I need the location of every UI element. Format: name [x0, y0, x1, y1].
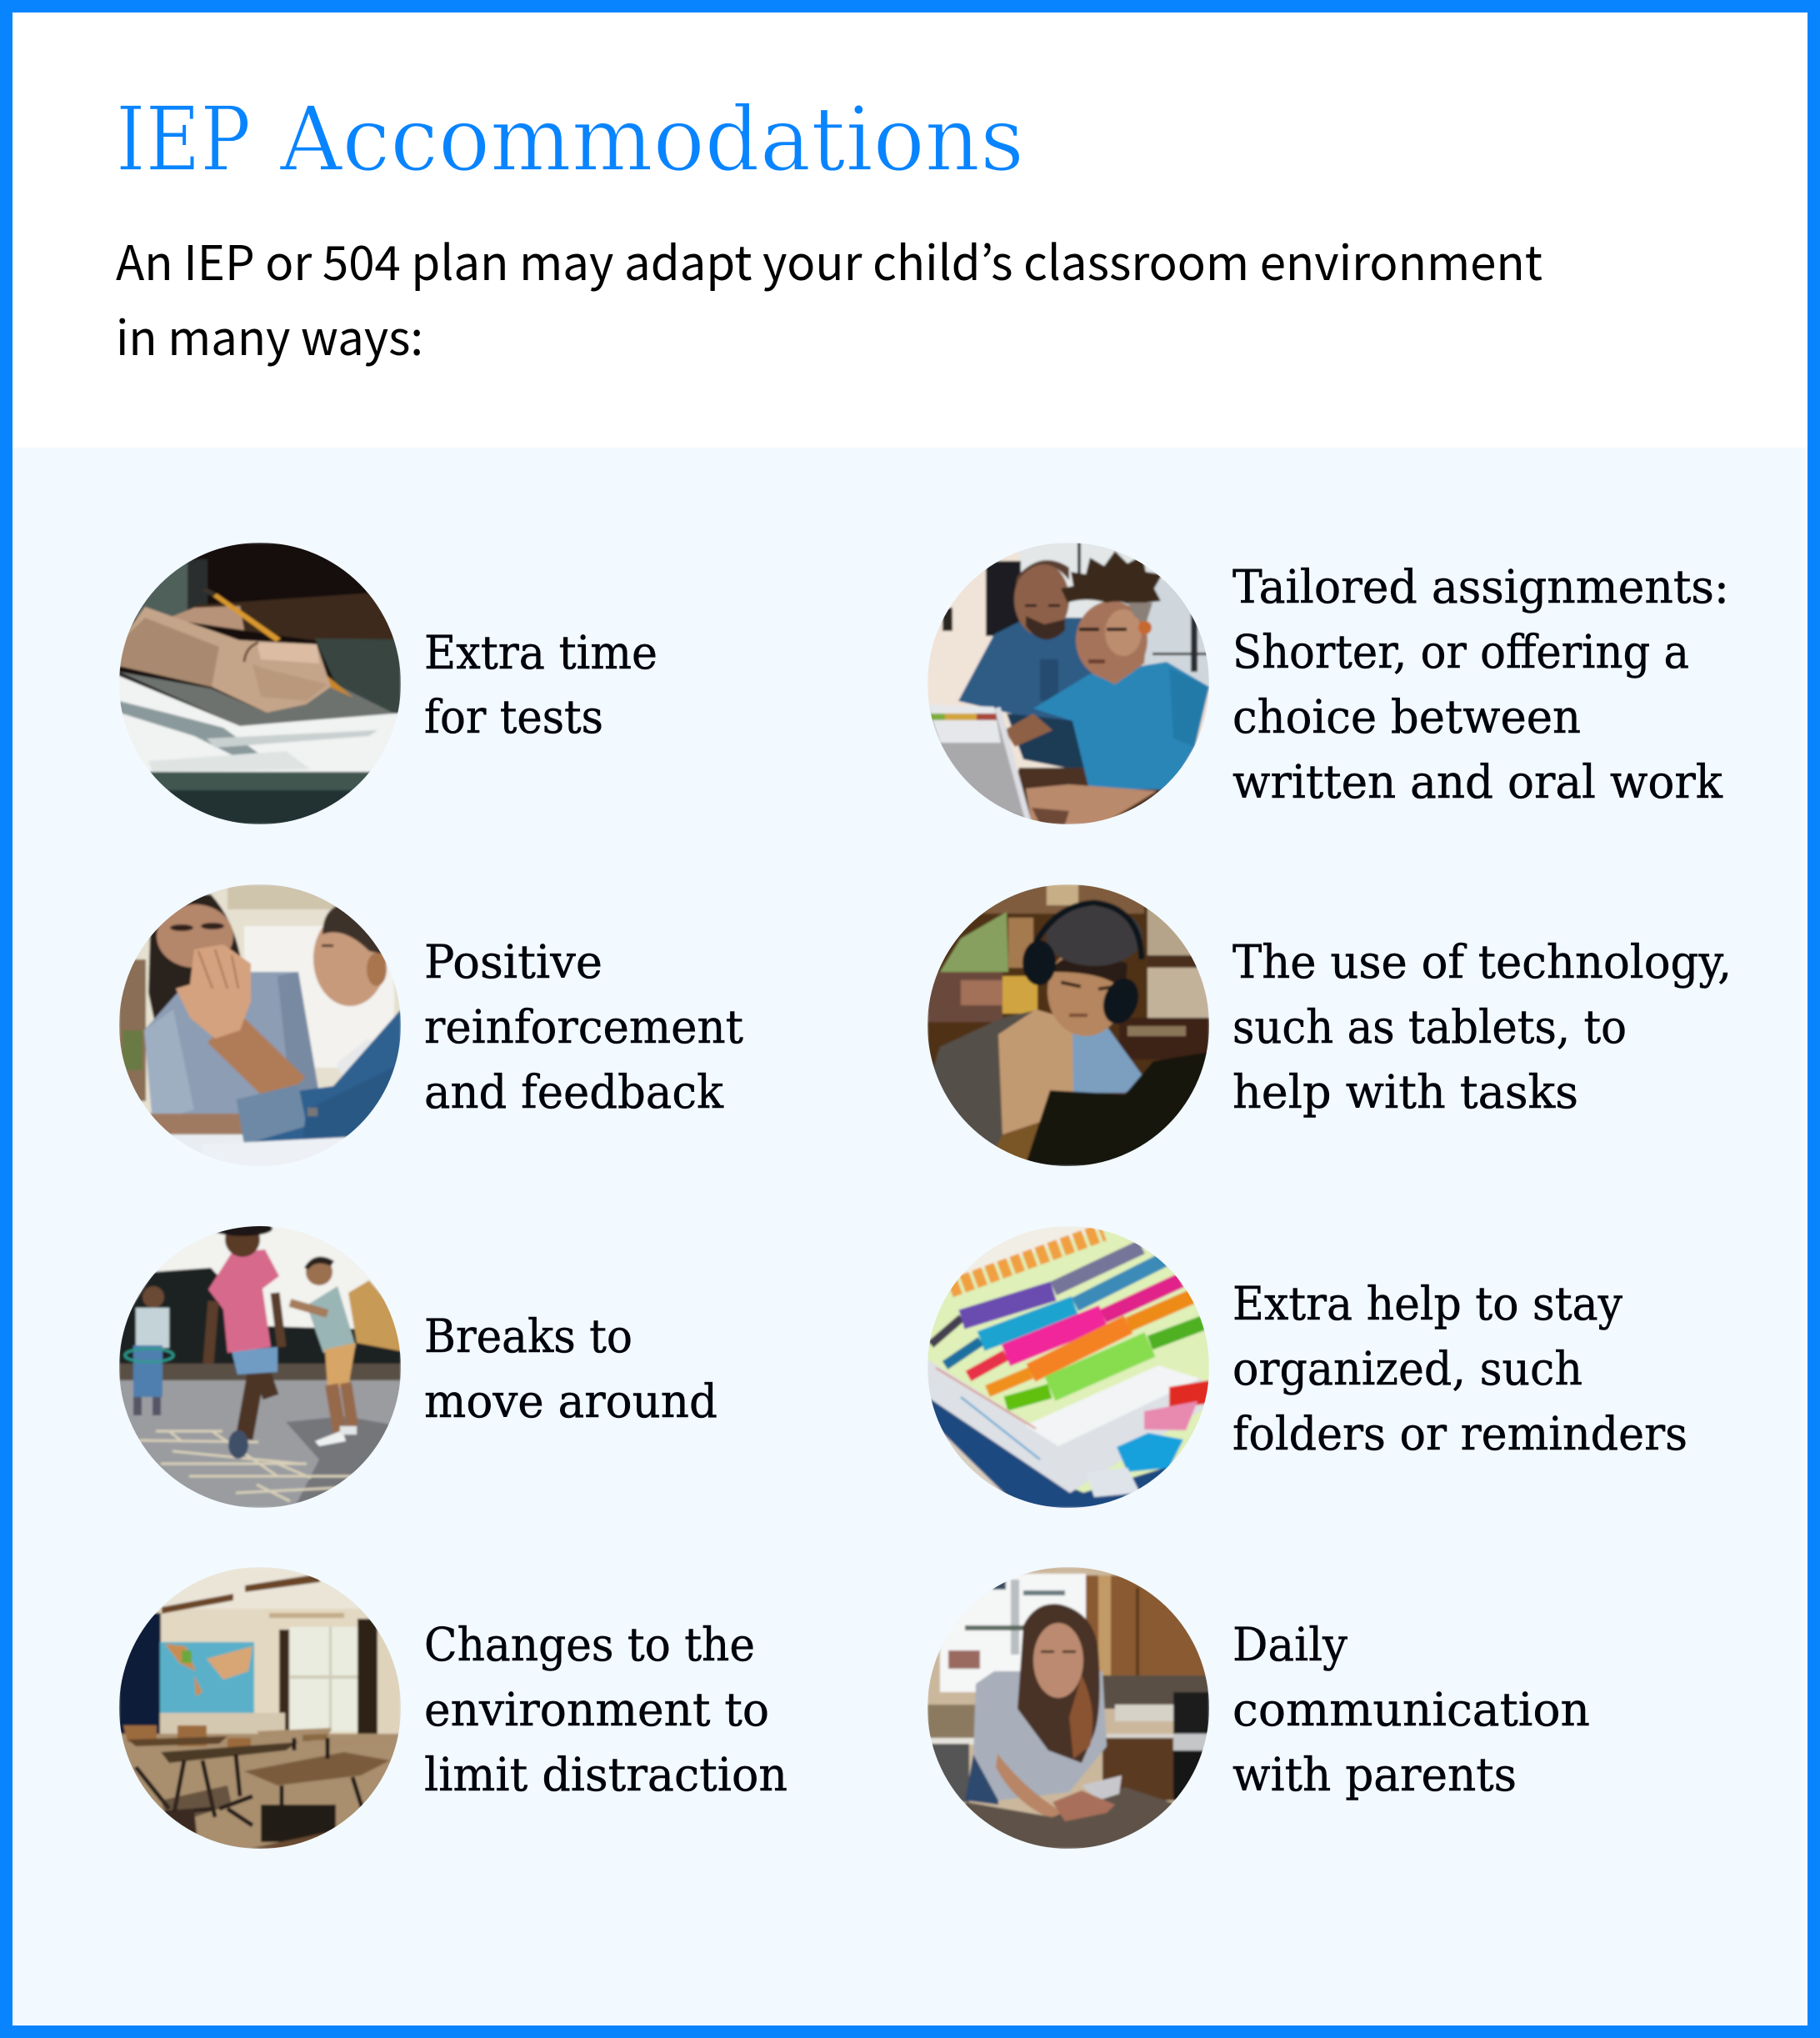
label text: with parents — [1232, 1748, 1517, 1801]
photo: father and son at laptop — [928, 543, 1209, 824]
label text: for tests — [424, 690, 603, 744]
intro text — [116, 226, 1542, 369]
label text: such as tablets, to — [1232, 1000, 1627, 1054]
photo: kids playing hopscotch — [119, 1221, 401, 1508]
item: positive reinforcement — [119, 884, 743, 1166]
label text — [1232, 1277, 1688, 1460]
label text: choice between — [1232, 690, 1581, 744]
label text — [424, 935, 743, 1119]
label text: Daily — [1232, 1618, 1348, 1671]
label text: Shorter, or offering a — [1232, 625, 1689, 678]
item: daily communication — [928, 1567, 1590, 1849]
title: Accommodations — [279, 88, 1024, 192]
label text: The use of technology, — [1232, 935, 1732, 989]
item: tailored assignments — [928, 543, 1729, 824]
label text: Tailored assignments: — [1232, 560, 1729, 613]
title: IEP — [116, 88, 251, 192]
item: use of technology — [928, 884, 1732, 1166]
label text: Extra help to stay — [1232, 1277, 1622, 1330]
photo: mother reading phone in kitchen — [928, 1567, 1209, 1849]
label text: Breaks to — [424, 1309, 632, 1363]
intro text: in many ways: — [116, 301, 423, 369]
label text: communication — [1232, 1683, 1590, 1736]
label text — [424, 1309, 718, 1428]
item: extra help to stay organized — [928, 1226, 1688, 1508]
photo: teen with headphones and laptop — [928, 884, 1209, 1166]
label text: reinforcement — [424, 1000, 743, 1054]
label text: Extra time — [424, 626, 658, 679]
intro text: An IEP or 504 plan may adapt your child’s classroom environment — [116, 226, 1542, 294]
panel: light blue list area — [12, 448, 1808, 2025]
label text — [424, 1618, 788, 1801]
label text: Positive — [424, 935, 602, 989]
label text — [1232, 1618, 1590, 1801]
label text: limit distraction — [424, 1748, 788, 1801]
label text: Changes to the — [424, 1618, 755, 1671]
photo: hand writing with pencil — [119, 543, 401, 824]
label text: move around — [424, 1375, 718, 1428]
item: extra time for tests — [119, 543, 658, 824]
photo: colored pens on notebook — [928, 1226, 1209, 1508]
label text — [1232, 935, 1732, 1119]
label text: environment to — [424, 1683, 769, 1736]
label text — [424, 626, 658, 744]
label text: help with tasks — [1232, 1065, 1578, 1119]
photo: empty classroom with world map — [119, 1567, 401, 1849]
label text: folders or reminders — [1232, 1407, 1688, 1460]
photo: woman and boy high five — [119, 884, 401, 1166]
item: breaks to move around — [119, 1221, 718, 1508]
item: changes to the environment — [119, 1567, 788, 1849]
label text: organized, such — [1232, 1342, 1582, 1395]
label text — [1232, 560, 1729, 809]
label text: and feedback — [424, 1065, 724, 1119]
label text: written and oral work — [1232, 755, 1723, 809]
